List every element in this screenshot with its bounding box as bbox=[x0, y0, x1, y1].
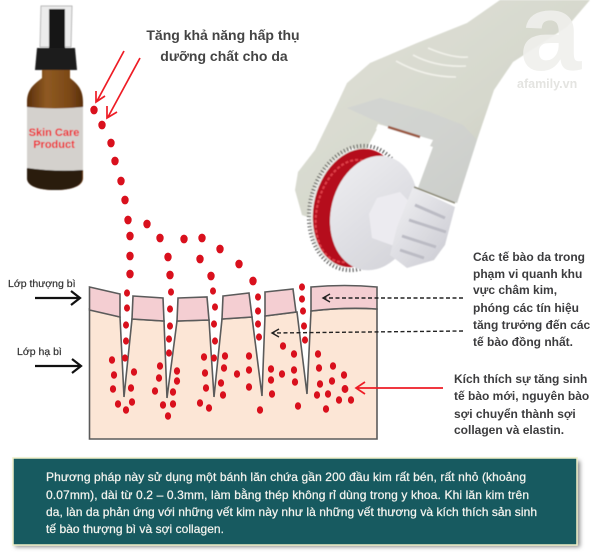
bottle label text bbox=[29, 127, 79, 151]
heading: absorption: Tăng khả năng hấp thụ bbox=[146, 27, 300, 43]
arrow: red stimulation arrow bbox=[356, 382, 443, 394]
bottle label text: Skin Care bbox=[29, 127, 79, 139]
text: growth signals: phạm vi quanh khu bbox=[473, 267, 582, 281]
text: growth signals bbox=[473, 250, 591, 349]
text: cell stimulation: Kích thích sự tăng sinh bbox=[454, 372, 587, 386]
text: growth signals: Các tế bào da trong bbox=[473, 250, 585, 264]
epidermis segments bbox=[90, 286, 377, 321]
arrow: epidermis bbox=[35, 291, 80, 305]
panel text: Phương pháp này sử dụng một bánh lăn chứa gần 200 đầu kim rất bén, rất nhỏ (khoảng bbox=[46, 470, 526, 484]
red nutrient dots bbox=[91, 106, 354, 419]
label: epidermis bbox=[8, 278, 80, 305]
panel text: da, làn da phản ứng với những vết kim này như là những vết thương và kích thích sản sinh bbox=[46, 505, 537, 519]
bottle collar bbox=[35, 48, 77, 70]
roller red core bbox=[301, 139, 413, 277]
icon: derma roller bbox=[295, 0, 590, 280]
arrow: dermis bbox=[35, 359, 81, 373]
text: cell stimulation: collagen và elastin. bbox=[454, 423, 564, 437]
text: growth signals: vực châm kim, bbox=[473, 283, 557, 297]
dermis layer bbox=[90, 308, 377, 439]
roller needles bbox=[296, 136, 418, 280]
label: dermis: Lớp hạ bì bbox=[17, 346, 62, 358]
roller gear knob bbox=[390, 187, 455, 268]
handle grooves bbox=[396, 48, 468, 77]
text: growth signals: phóng các tín hiệu bbox=[473, 301, 579, 315]
bottle clear cap bbox=[40, 6, 72, 47]
roller white disc bbox=[318, 146, 430, 280]
bottle label bbox=[27, 107, 83, 171]
text: growth signals: tăng trưởng đến các bbox=[473, 318, 591, 332]
icon: serum bottle bbox=[27, 6, 83, 190]
panel: method description bbox=[13, 458, 580, 547]
panel text: tế bào thượng bì và sợi collagen. bbox=[46, 522, 224, 536]
bottle glass body bbox=[27, 70, 83, 190]
roller handle bbox=[295, 0, 590, 222]
roller hub bbox=[369, 192, 417, 247]
label: dermis bbox=[17, 346, 81, 373]
label: epidermis: Lớp thượng bì bbox=[8, 278, 76, 290]
panel text bbox=[46, 470, 537, 536]
handle ring bbox=[414, 187, 455, 203]
bottle label text: Product bbox=[33, 139, 75, 151]
handle shadow bbox=[347, 98, 477, 203]
bottle base bbox=[27, 168, 82, 190]
heading: absorption: dưỡng chất cho da bbox=[160, 48, 288, 64]
watermark: afamily.vn: afamily.vn bbox=[517, 77, 577, 91]
text: cell stimulation bbox=[454, 372, 589, 437]
text: cell stimulation: tế bào mới, nguyên bào bbox=[454, 389, 589, 403]
arrows: red absorption arrows bbox=[96, 51, 140, 118]
text: growth signals: tế bào đồng nhất. bbox=[473, 335, 573, 349]
roller back white bbox=[297, 139, 409, 277]
arrows: dashed signal arrows bbox=[272, 294, 463, 337]
chart: skin cross-section bbox=[90, 106, 377, 439]
bottle pump bbox=[49, 9, 65, 48]
opening under handle bbox=[376, 124, 433, 146]
heading: absorption bbox=[146, 27, 300, 64]
panel text: 0.07mm), dài từ 0.2 – 0.3mm, làm bằng thép không rỉ dùng trong y khoa. Khi lăn kim trên bbox=[46, 487, 529, 502]
text: cell stimulation: sợi chuyển thành sợi bbox=[454, 407, 576, 421]
